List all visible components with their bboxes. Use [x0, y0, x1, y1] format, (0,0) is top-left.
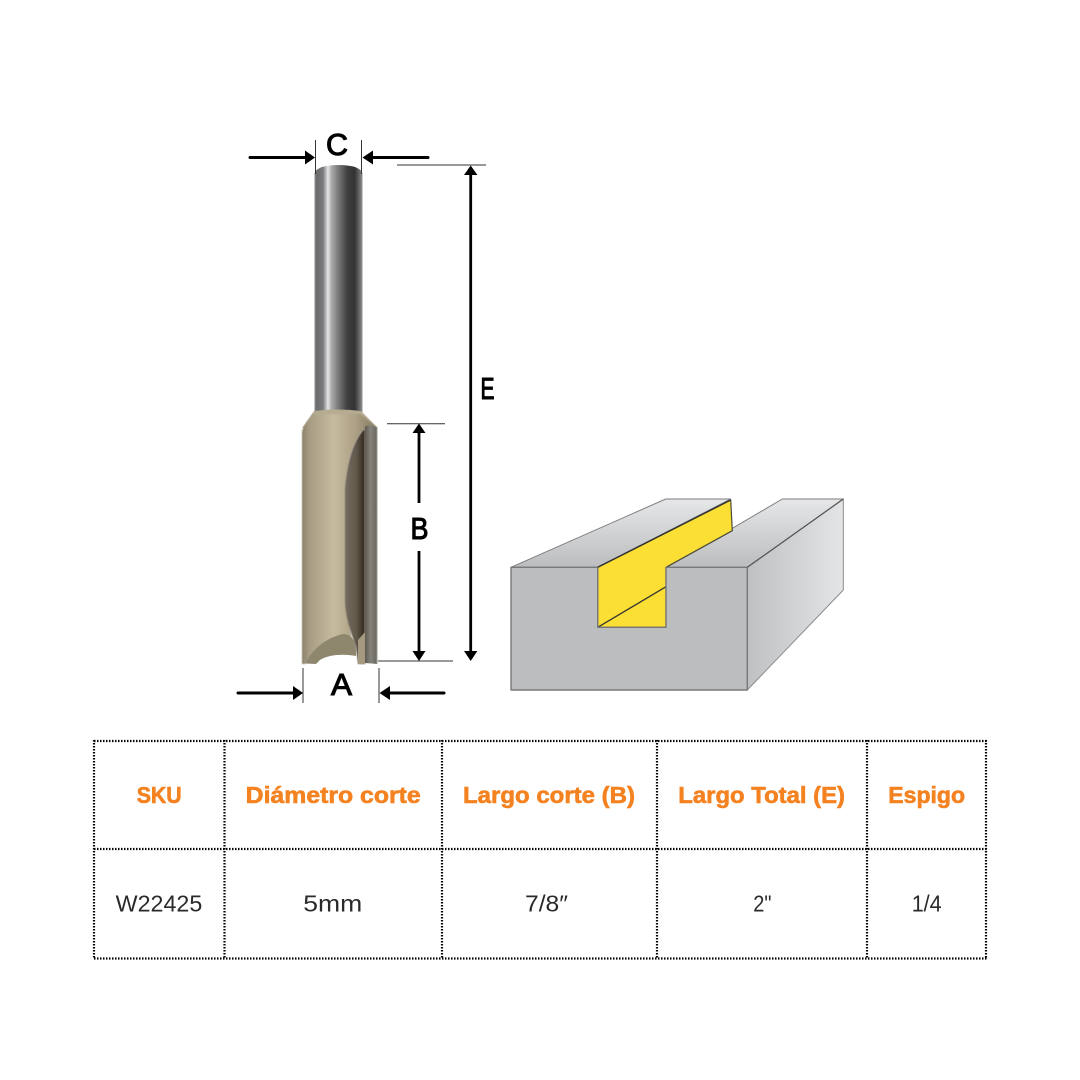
dimension A — [238, 667, 444, 703]
shank — [314, 165, 362, 414]
table header row: Espigo — [888, 782, 965, 808]
table header row: Largo Total (E) — [678, 782, 845, 808]
label B: B — [410, 511, 428, 546]
label E: E — [480, 371, 494, 406]
router bit photo — [302, 165, 378, 664]
yellow groove — [598, 500, 732, 627]
table value row — [116, 890, 942, 916]
table value row: 7/8″ — [525, 890, 568, 916]
block right side — [747, 499, 843, 690]
body shoulder collar — [302, 410, 378, 428]
block front face — [511, 567, 747, 690]
block top left face — [511, 499, 731, 567]
block top right face — [666, 499, 843, 567]
label A: A — [331, 667, 352, 702]
table value row: W22425 — [116, 890, 202, 916]
table value row: 2" — [753, 890, 772, 916]
table grid — [94, 740, 987, 959]
table value row: 1/4 — [912, 890, 942, 916]
table header row — [137, 782, 965, 808]
table header row: SKU — [137, 782, 182, 808]
groove floor line — [598, 587, 666, 627]
label C: C — [326, 127, 348, 162]
dimension B — [378, 424, 453, 661]
tan sliver — [358, 632, 365, 664]
grooved wood block diagram — [511, 499, 843, 690]
table value row: 5mm — [303, 890, 362, 916]
end crescent — [305, 634, 356, 664]
dimension C — [250, 127, 428, 174]
table header row: Diámetro corte — [246, 782, 421, 808]
dimension E — [397, 165, 494, 661]
table header row: Largo corte (B) — [463, 782, 635, 808]
cutting edge strip — [365, 425, 378, 664]
specification table — [94, 740, 987, 959]
flute — [345, 425, 370, 664]
gold cutter body — [302, 414, 378, 664]
